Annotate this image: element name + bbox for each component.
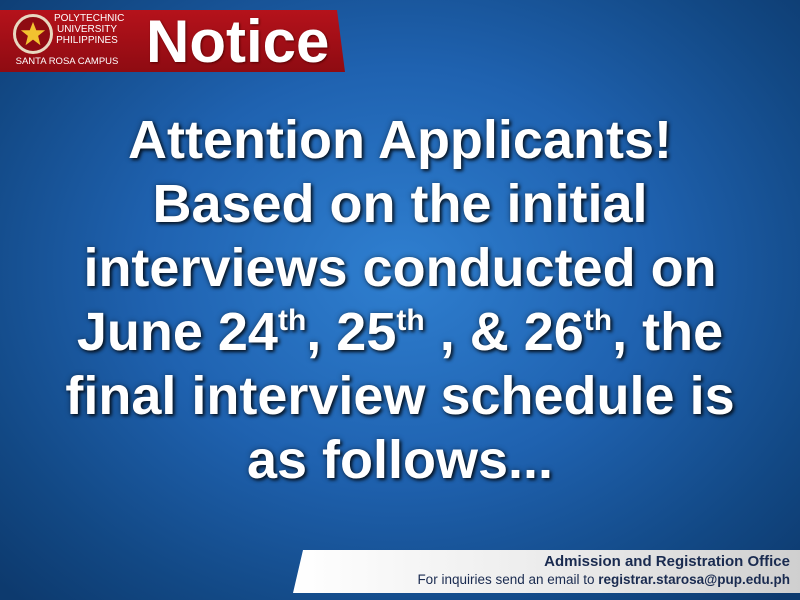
icon: university seal xyxy=(13,14,53,54)
main announcement text: final interview schedule is xyxy=(65,366,735,426)
university name xyxy=(54,14,124,43)
university name: UNIVERSITY xyxy=(57,24,117,35)
main announcement text: Based on the initial xyxy=(152,174,648,234)
title: Notice: Notice xyxy=(146,8,329,75)
campus name: SANTA ROSA CAMPUS xyxy=(16,56,118,67)
university name: POLYTECHNIC xyxy=(54,13,124,24)
footer: contact info: Admission and Registration Office xyxy=(544,553,790,570)
main announcement text: as follows... xyxy=(247,430,553,490)
footer: contact info: For inquiries send an email to registrar.starosa@pup.edu.ph xyxy=(417,572,790,587)
footer: contact info xyxy=(293,550,800,593)
main announcement text: interviews conducted on xyxy=(83,238,717,298)
main announcement text: June 24th, 25th , & 26th, the xyxy=(77,302,723,362)
main announcement text: Attention Applicants! xyxy=(128,110,672,170)
banner: notice header xyxy=(0,10,345,72)
main announcement text xyxy=(64,110,737,490)
university name: PHILIPPINES xyxy=(56,35,118,46)
